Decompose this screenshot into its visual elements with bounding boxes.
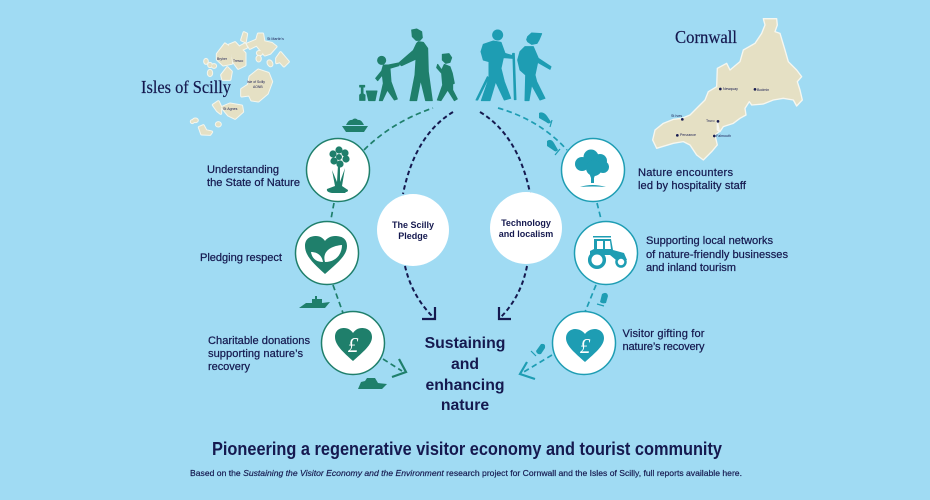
- panel: tractor: [574, 222, 638, 284]
- map: Cornwall: St Ives: [671, 114, 682, 118]
- panel: The Scilly Pledge: The Scilly: [392, 220, 434, 230]
- text: Nature encounters: [638, 167, 747, 192]
- text: Visitor gifting: Visitor gifting for: [622, 328, 705, 340]
- map: Cornwall: [653, 19, 802, 160]
- illustration: family with children: [360, 29, 457, 101]
- map: Isles of Scilly: Isle of Scilly: [247, 80, 265, 84]
- map: Isles of Scilly: [191, 33, 288, 134]
- arrowhead: teal: [520, 362, 535, 379]
- map: Isles of Scilly: Bryher: [217, 57, 228, 61]
- map: Cornwall: Falmouth: [716, 134, 731, 138]
- heading: Isles of Scilly: Isles of Scilly: [141, 77, 231, 97]
- panel: tree: [562, 138, 624, 202]
- heading: Sustaining and enhancing nature: [425, 335, 505, 414]
- title: Pioneering a regenerative visitor economy and tourist community: [212, 438, 723, 459]
- heading: Sustaining and enhancing nature: nature: [441, 397, 489, 414]
- text: Charitable donations: supporting nature’s: [208, 348, 303, 360]
- heading: Sustaining and enhancing nature: enhancing: [426, 377, 504, 394]
- text: Supporting local networks: Supporting local networks: [646, 235, 773, 247]
- panel: The Scilly Pledge: Pledge: [398, 231, 428, 241]
- panel: Technology and localism: and localism: [499, 229, 553, 239]
- heading: Cornwall: Cornwall: [675, 27, 737, 47]
- icon: heart with leaves: [305, 236, 347, 274]
- panel: The Scilly Pledge: [377, 194, 449, 266]
- text: Charitable donations: Charitable donations: [208, 335, 310, 347]
- connector: left visitor path: [331, 108, 433, 371]
- footnote: Based on the Sustaining the Visitor Economy and the Environment research project for Cornwall and the Isles of Scilly, full reports available here.: [190, 468, 742, 478]
- icon: footprints 4: [531, 344, 545, 356]
- text: Supporting local networks: [646, 235, 788, 274]
- icon: flower: [327, 146, 350, 193]
- icon: footprints 3: [597, 293, 608, 306]
- map: Cornwall: Bodmin: [757, 88, 769, 92]
- text: Understanding the State of Nature: [207, 164, 300, 189]
- heading: Sustaining and enhancing nature: Sustaining: [425, 335, 505, 352]
- map: Isles of Scilly: St Agnes: [223, 107, 238, 111]
- panel: Technology and localism: Technology: [501, 218, 551, 228]
- icon: boat: [299, 296, 330, 308]
- text: Pledging respect: Pledging respect: [200, 252, 282, 264]
- icon: footprints 2: [547, 140, 560, 155]
- text: Charitable donations: [208, 335, 310, 373]
- figure: left child: [376, 56, 399, 101]
- arrowhead: green: [392, 359, 406, 377]
- figure: hiker with poles: [476, 30, 516, 101]
- text: Supporting local networks: and inland tourism: [646, 262, 736, 274]
- text: Supporting local networks: of nature-friendly businesses: [646, 249, 788, 261]
- icon: heart with pound: £: [580, 334, 591, 358]
- icon: ferry top: [342, 118, 368, 132]
- panel: heart and leaves: [296, 222, 358, 284]
- map: Isles of Scilly: AONB: [253, 85, 263, 89]
- text: Charitable donations: recovery: [208, 361, 250, 373]
- arrowhead: navy right: [499, 307, 511, 319]
- connector: right visitor path: [498, 108, 601, 373]
- icon: bucket and spade: [360, 85, 377, 101]
- panel: right pound heart: [552, 312, 616, 374]
- text: Nature encounters: led by hospitality staff: [638, 180, 747, 192]
- text: Understanding the State of Nature: the State of Nature: [207, 177, 300, 189]
- heading: Sustaining and enhancing nature: and: [451, 356, 479, 373]
- panel: flower: [306, 138, 370, 202]
- map: Isles of Scilly: Tresco: [233, 59, 243, 63]
- figure: hiker with backpack: [518, 33, 551, 101]
- icon: footprints 1: [539, 112, 552, 127]
- text: Visitor gifting: nature’s recovery: [622, 341, 705, 353]
- connector: Technology and localism path: [480, 112, 530, 318]
- figure: right child: [437, 54, 457, 101]
- map: Cornwall: Newquay: [723, 87, 738, 91]
- connector: Scilly Pledge path: [403, 112, 453, 319]
- arrowhead: navy left: [422, 307, 435, 319]
- figure: adult: [398, 29, 432, 101]
- icon: tree: [575, 150, 609, 187]
- icon: tractor: [590, 236, 627, 267]
- map: Cornwall: Penzance: [680, 133, 696, 137]
- text: Nature encounters: Nature encounters: [638, 167, 733, 179]
- map: Isles of Scilly: St Martin's: [267, 37, 284, 41]
- icon: cruise ship: [358, 378, 387, 389]
- text: Visitor gifting: [622, 328, 705, 353]
- panel: left pound heart: [322, 312, 384, 374]
- text: Understanding the State of Nature: Understanding: [207, 164, 279, 176]
- panel: Technology and localism: [490, 192, 562, 264]
- map: Cornwall: Truro: [706, 119, 714, 123]
- icon: heart with pound: £: [348, 333, 359, 357]
- illustration: hikers: [476, 30, 551, 101]
